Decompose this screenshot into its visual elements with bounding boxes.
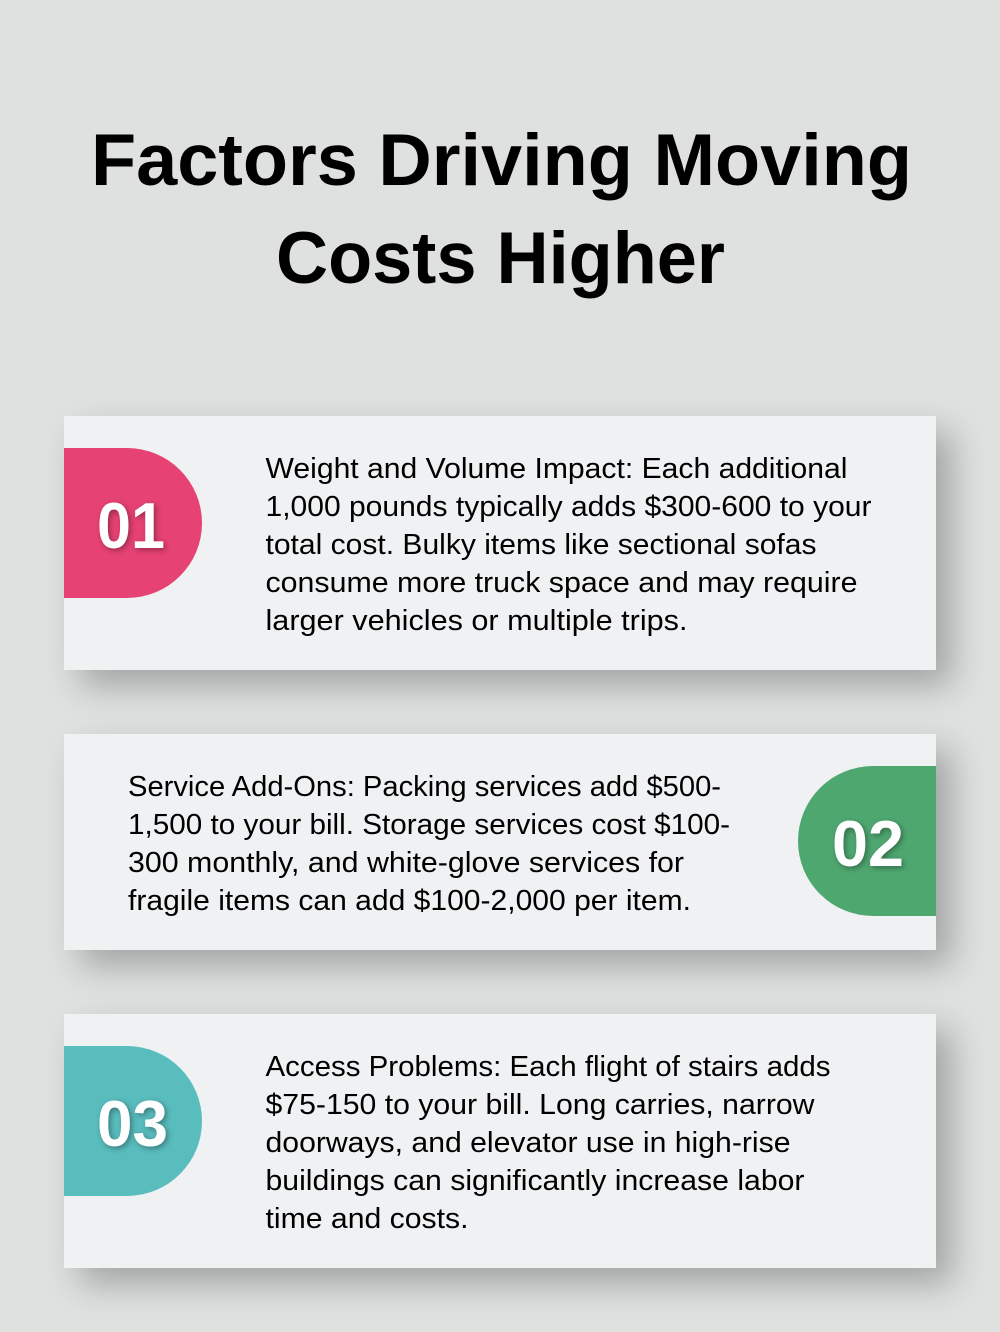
text block: access problems: Access Problems: Each flight of stairs adds bbox=[266, 1051, 830, 1083]
badge: 03 bbox=[64, 1046, 202, 1196]
text block: weight and volume: 1,000 pounds typically adds $300-600 to your bbox=[266, 491, 872, 523]
text block: service add-ons: Service Add-Ons: Packing services add $500- bbox=[128, 771, 721, 803]
badge: 01 bbox=[64, 448, 202, 598]
title: Factors Driving Moving bbox=[91, 120, 912, 201]
text block: access problems: doorways, and elevator use in high-rise bbox=[266, 1127, 790, 1159]
text block: access problems: time and costs. bbox=[266, 1203, 468, 1235]
text block: service add-ons: 300 monthly, and white-glove services for bbox=[128, 847, 684, 879]
number: 02: 02 bbox=[832, 807, 904, 880]
panel: access problems bbox=[64, 1014, 936, 1268]
panel: service add-ons bbox=[64, 734, 936, 950]
badge: 02 bbox=[798, 766, 936, 916]
text block: access problems: buildings can significantly increase labor bbox=[266, 1165, 805, 1197]
text block: weight and volume: larger vehicles or multiple trips. bbox=[266, 605, 688, 637]
text block: access problems bbox=[266, 1051, 830, 1235]
text block: service add-ons bbox=[128, 771, 730, 917]
text block: weight and volume: Weight and Volume Impact: Each additional bbox=[266, 453, 848, 485]
text block: weight and volume bbox=[266, 453, 872, 637]
title: Costs Higher bbox=[276, 218, 725, 299]
number: 01: 01 bbox=[97, 489, 165, 562]
text block: service add-ons: fragile items can add $100-2,000 per item. bbox=[128, 885, 691, 917]
panel: weight and volume impact bbox=[64, 416, 936, 670]
text block: weight and volume: total cost. Bulky items like sectional sofas bbox=[266, 529, 816, 561]
text block: service add-ons: 1,500 to your bill. Storage services cost $100- bbox=[128, 809, 730, 841]
number: 03: 03 bbox=[97, 1087, 168, 1160]
title bbox=[91, 120, 912, 299]
text block: weight and volume: consume more truck space and may require bbox=[266, 567, 858, 599]
text block: access problems: $75-150 to your bill. Long carries, narrow bbox=[266, 1089, 816, 1121]
